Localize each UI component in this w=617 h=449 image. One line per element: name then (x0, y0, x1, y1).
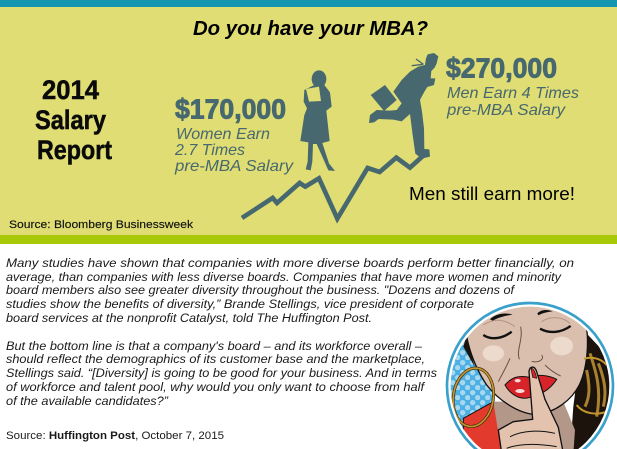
text block: diversity paragraph 1 (6, 256, 574, 325)
text block: diversity paragraph 2 (6, 339, 437, 408)
illustration: woman shushing in circle (443, 300, 613, 449)
panel: salary report (0, 7, 617, 235)
heading: 2014 salary report: Report (37, 135, 112, 165)
neck (493, 402, 575, 449)
women salary text (174, 94, 294, 175)
text block: diversity paragraph 1: board services at the nonprofit Catalyst, told The Huffington Post. (6, 311, 372, 325)
nose (498, 327, 561, 382)
top teal bar (0, 0, 617, 7)
red top (463, 402, 505, 449)
text block: diversity paragraph 1: board members also see greater diversity throughout the business. "Dozens and dozens of (6, 283, 516, 297)
text block: diversity paragraph 2: of the available candidates?” (6, 394, 169, 408)
face (467, 300, 587, 415)
finger and hand (498, 367, 563, 449)
men salary text (446, 52, 579, 119)
gold earrings (452, 366, 496, 428)
icon: woman silhouette (300, 70, 335, 171)
green divider bar (0, 235, 617, 244)
women salary text: $170,000 (175, 94, 286, 124)
title: Do you have your MBA? (193, 17, 428, 40)
men salary text: Men Earn 4 Times (447, 85, 579, 102)
heading: 2014 salary report (35, 75, 112, 165)
dotted background (450, 340, 492, 430)
lips (505, 375, 557, 398)
hair (572, 334, 610, 449)
men salary text: pre-MBA Salary (446, 102, 566, 119)
source: Huffington Post: Source: Huffington Post , October 7, 2015 (6, 430, 224, 442)
women salary text: Women Earn (176, 126, 270, 143)
icon: running man silhouette (369, 53, 438, 159)
text block: diversity paragraph 2: But the bottom line is that a company's board – and its workforce overall – (6, 339, 422, 353)
source: Bloomberg Businessweek: Source: Bloomberg Businessweek (9, 219, 193, 231)
text block: diversity paragraph 1: average, than companies with less diverse boards. Companies that have more women and minority (6, 270, 562, 284)
heading: 2014 salary report: Salary (35, 105, 106, 135)
icon: rising line chart (242, 152, 427, 219)
eyes and brows (483, 332, 512, 338)
text block: diversity paragraph 2: of workforce and talent pool, why would you only want to choose from half (6, 380, 426, 394)
men salary text: $270,000 (446, 52, 557, 84)
icon: briefcase (371, 85, 397, 111)
text block: diversity paragraph 2: should reflect the demographics of its customer base and the marketplace, (6, 352, 425, 366)
heading: 2014 salary report: 2014 (42, 75, 99, 105)
callout: men still earn more: Men still earn more! (409, 184, 575, 204)
icon: clipboard paper (306, 87, 321, 102)
text block: diversity paragraph 2: Stellings said. “[Diversity] is going to be good for your business. And in terms (6, 366, 437, 380)
text block: diversity paragraph 1: Many studies have shown that companies with more diverse boards perform better financially, on (6, 256, 574, 270)
women salary text: 2.7 Times (174, 142, 245, 159)
women salary text: pre-MBA Salary (174, 158, 294, 175)
text block: diversity paragraph 1: studies show the benefits of diversity,” Brande Stellings, vice president of corporate (6, 297, 474, 311)
